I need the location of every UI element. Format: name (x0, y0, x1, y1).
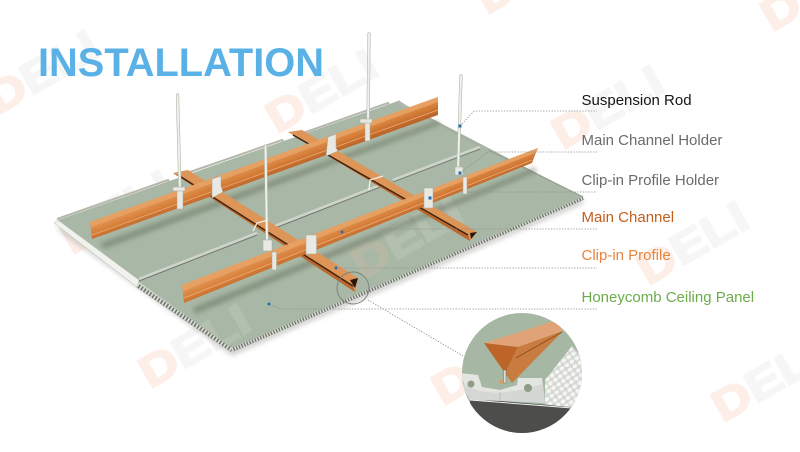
inset: magnified clip-in detail (462, 313, 582, 433)
watermarks over the panel: DELI (131, 295, 259, 398)
main channels (90, 97, 538, 303)
title: INSTALLATION (38, 41, 324, 85)
watermarks behind the drawing: DELI (424, 312, 552, 415)
white edge strip (460, 373, 545, 403)
label: Clip-in Profile Holder: Clip-in Profile Holder (582, 172, 719, 189)
ceiling assembly illustration (54, 32, 585, 358)
watermarks over the panel (200, 196, 464, 345)
channel shadows (100, 120, 537, 314)
label: Clip-in Profile: Clip-in Profile (582, 247, 671, 264)
main channel holders and clips (173, 119, 467, 270)
detail circle on the assembly (337, 272, 369, 304)
leader lines and dots (268, 111, 597, 356)
honeycomb core (545, 346, 582, 407)
honeycomb ceiling panel (54, 101, 583, 350)
suspension rods (178, 34, 461, 242)
watermarks behind the drawing: DELI (131, 295, 259, 398)
profile one (173, 170, 358, 292)
label: Main Channel Holder: Main Channel Holder (582, 132, 722, 149)
main channel one (90, 97, 438, 239)
watermarks behind the drawing: DELI (258, 40, 386, 143)
profile two (288, 130, 477, 241)
main channel two (182, 148, 538, 303)
copper profile section (484, 320, 563, 347)
panel drop shadow (56, 198, 583, 356)
watermarks behind the drawing: DELI (544, 56, 672, 159)
label: Main Channel: Main Channel (582, 209, 674, 226)
watermarks over the panel: DELI (343, 186, 471, 289)
label: Honeycomb Ceiling Panel: Honeycomb Ceiling Panel (582, 289, 754, 306)
watermarks behind the drawing: DELI (53, 161, 181, 264)
clip-in profiles (173, 130, 477, 292)
watermarks behind the drawing: DELI (629, 192, 757, 295)
label: Suspension Rod: Suspension Rod (582, 92, 692, 109)
